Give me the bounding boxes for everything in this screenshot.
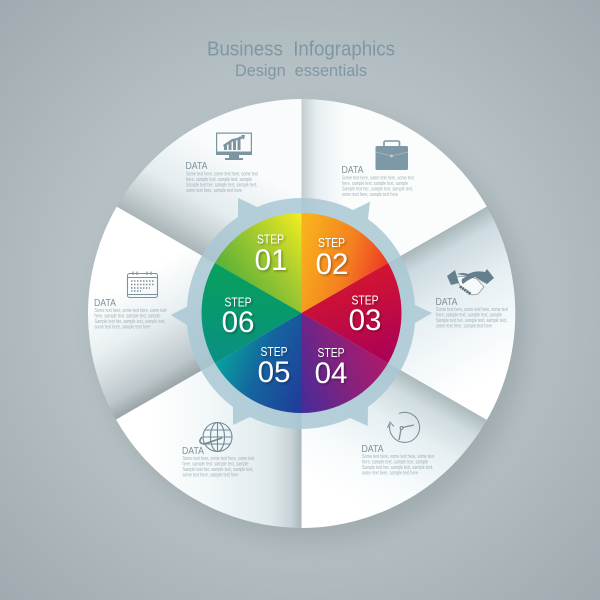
segment 03 (302, 263, 401, 363)
data text: step 5: DATA (182, 446, 204, 457)
data text: step 1: here, sample text. sample text, sample (186, 177, 252, 183)
step labels: STEP (260, 345, 288, 359)
data text: step 3: some text here, sample text here (436, 324, 492, 330)
data text: step 4: some text here, sample text here (362, 470, 418, 476)
segment 02 (302, 213, 388, 313)
drop shadow of the wheel (98, 112, 526, 540)
data text: step 5: Sample text her, sample text, sample text, (182, 467, 254, 473)
data text: step 5: some text here, sample text here (182, 472, 239, 478)
data text: step 4: Sample text her, sample text, sample text, (362, 465, 433, 471)
panel: step 5 sheet (116, 313, 302, 528)
data text: step 3: here, sample text. sample text, sample (436, 312, 502, 318)
data text: step 5: Some text here, some text here, some text (182, 456, 255, 462)
icon: monitor with chart (216, 132, 252, 160)
data text: step 6: Sample text her, sample text, sample text, (94, 319, 166, 325)
panel: step 1 sheet (117, 99, 302, 313)
data text: step 6: here, sample text. sample text, sample (94, 314, 161, 320)
step labels: 06 (222, 306, 254, 339)
title: Business Infographics (207, 38, 395, 60)
step labels: 02 (316, 248, 348, 281)
data text: step 1: Some text here, some text here, some text (186, 172, 258, 178)
data text: step 2: Sample text her, sample text, sample text, (342, 186, 413, 192)
segment 04 (302, 313, 388, 413)
step labels: STEP (318, 346, 344, 360)
segment 01 (215, 213, 302, 313)
data text: step 4: DATA (362, 444, 384, 455)
data text: step 1: Sample text her, sample text, sample text, (186, 182, 257, 188)
data text: step 6: DATA (94, 298, 116, 309)
data text: step 2: some text here, sample text here (342, 192, 398, 198)
icon: handshake (447, 269, 494, 295)
panel: step 6 sheet (88, 207, 301, 420)
data text: step 1: some text here, sample text here (186, 188, 242, 194)
step labels: STEP (318, 236, 345, 250)
segment 06 (202, 263, 302, 363)
icon: briefcase (376, 141, 408, 170)
step labels: STEP (224, 296, 252, 310)
title (207, 38, 395, 80)
data text: step 3 (436, 297, 508, 330)
data text: step 1: DATA (186, 161, 208, 172)
step labels: 05 (258, 356, 290, 389)
data text: step 2: Some text here, some text here, some text (342, 176, 414, 182)
data text: step 4 (362, 444, 434, 476)
data text: step 6: some text here, sample text here (94, 324, 151, 330)
step labels: 01 (255, 244, 287, 277)
data text: step 4: Some text here, some text here, some text (362, 454, 434, 460)
step labels (222, 232, 381, 390)
icon: calendar (128, 272, 158, 298)
data text: step 3: DATA (436, 297, 458, 308)
step wheel (202, 213, 401, 413)
data text: step 6: Some text here, some text here, some text (94, 308, 167, 314)
step labels: STEP (257, 232, 284, 246)
panel: step 3 sheet (302, 207, 515, 420)
segment 05 (215, 313, 302, 413)
title: Design essentials (235, 61, 367, 80)
data text: step 6 (94, 298, 167, 330)
data text: step 3: Some text here, some text here, some text (436, 307, 508, 313)
panel: step 4 sheet (302, 313, 487, 528)
step labels: STEP (352, 294, 378, 308)
data text: step 2: here, sample text. sample text, sample (342, 181, 408, 187)
icon: globe (200, 422, 232, 452)
data text: step 2: DATA (342, 165, 364, 176)
step labels: 03 (349, 304, 381, 337)
data text: step 4: here, sample text. sample text, sample (362, 460, 428, 466)
step labels: 04 (315, 357, 347, 390)
icon: clock (388, 412, 420, 442)
data text: step 1 (186, 161, 258, 194)
data text: step 3: Sample text her, sample text, sample text, (436, 318, 507, 324)
panel: step 2 sheet (302, 99, 487, 313)
data text: step 5: here, sample text. sample text, sample (182, 462, 249, 468)
data text: step 2 (342, 165, 414, 198)
ring with arrows (171, 198, 432, 429)
data text: step 5 (182, 446, 255, 478)
